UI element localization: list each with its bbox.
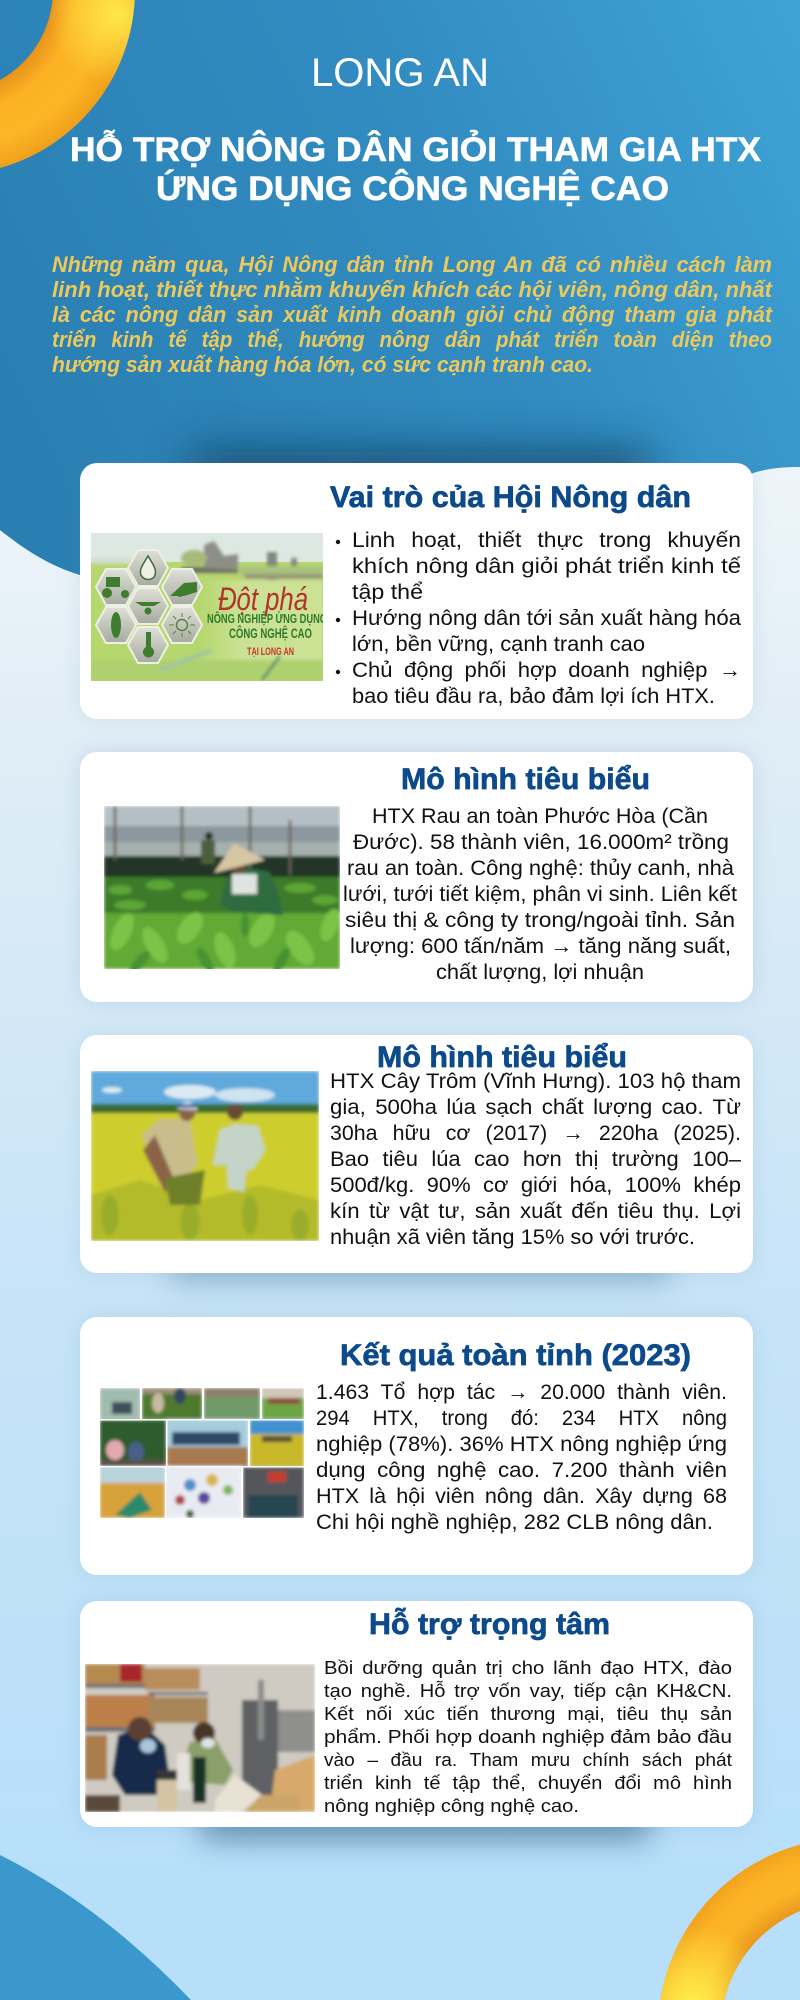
body text: key support: Bồi dưỡng quản trị cho lãnh đạo HTX, đào (324, 1657, 732, 1678)
body text: Cay Trom: nhuận xã viên tăng 15% so với trước. (330, 1226, 695, 1249)
panel: model cooperative Cay Trom (80, 1035, 753, 1283)
image: workers packaging products (85, 1664, 315, 1812)
blue corner shape bottom left (0, 1855, 191, 2000)
heading: model one: Mô hình tiêu biểu (401, 763, 650, 796)
body text: Cay Trom (330, 1070, 741, 1249)
yellow ring bottom right (660, 1845, 800, 2000)
bullet list: Hướng nông dân tới sản xuất hàng hóa (352, 607, 741, 630)
blue header background (0, 0, 800, 596)
title: HỖ TRỢ NÔNG DÂN GIỎI THAM GIA HTX (70, 130, 761, 169)
body text: Cay Trom: gia, 500ha lúa sạch chất lượng cao. Từ (330, 1096, 741, 1119)
body text: Cay Trom: Bao tiêu lúa cao hơn thị trường 100– (330, 1148, 741, 1171)
body text: key support: nông nghiệp công nghệ cao. (324, 1795, 579, 1816)
body text: results: nghiệp (78%). 36% HTX nông nghiệp ứng (316, 1433, 727, 1456)
image: high tech agriculture: TẠI LONG AN (247, 646, 294, 658)
heading: role: Vai trò của Hội Nông dân (330, 481, 691, 514)
body text: key support: Kết nối xúc tiến thương mại, tiêu thụ sản (324, 1703, 732, 1724)
body text: Cay Trom: 30ha hữu cơ (2017) → 220ha (2025). (330, 1122, 741, 1145)
yellow ring top left (0, 0, 135, 168)
panel: province-wide results 2023 (80, 1317, 753, 1575)
image: photo collage (100, 1388, 304, 1518)
body text: Phuoc Hoa: chất lượng, lợi nhuận (436, 961, 644, 984)
body text: Phuoc Hoa: HTX Rau an toàn Phước Hòa (Cần (372, 805, 708, 828)
intro paragraph: hướng sản xuất hàng hóa lớn, có sức cạnh tranh cao. (52, 352, 593, 377)
title (70, 130, 761, 208)
heading: model two: Mô hình tiêu biểu (377, 1041, 627, 1074)
title: ỨNG DỤNG CÔNG NGHỆ CAO (156, 169, 669, 208)
body text: Phuoc Hoa: lưới, tưới tiết kiệm, phân vi sinh. Liên kết (343, 883, 737, 906)
body text: results: Chi hội nghề nghiệp, 282 CLB nông dân. (316, 1511, 713, 1534)
body text: results: HTX là hội viên nông dân. Xây dựng 68 (316, 1485, 727, 1508)
body text: key support: triển kinh tế tập thể, chuyển đổi mô hình (324, 1772, 732, 1793)
heading: results: Kết quả toàn tỉnh (2023) (340, 1339, 691, 1372)
intro paragraph (52, 252, 774, 377)
heading: province: LONG AN (311, 51, 489, 95)
bullet list: Linh hoạt, thiết thực trong khuyến (352, 529, 741, 552)
body text: results: 1.463 Tổ hợp tác → 20.000 thành viên. (316, 1381, 727, 1404)
intro paragraph: là các nông dân sản xuất kinh doanh giỏi chủ động tham gia phát (52, 302, 774, 327)
image: high tech agriculture: CÔNG NGHỆ CAO (229, 624, 312, 641)
body text: Phuoc Hoa: rau an toàn. Công nghệ: thủy canh, nhà (347, 857, 734, 880)
heading: key support: Hỗ trợ trọng tâm (369, 1607, 610, 1641)
body text: Phuoc Hoa: lượng: 600 tấn/năm → tăng năng suất, (350, 935, 731, 958)
image: high tech agriculture: Đột phá (218, 581, 308, 617)
panel: key support (80, 1601, 753, 1841)
bullet list (336, 529, 741, 708)
body text: key support: phẩm. Phối hợp doanh nghiệp đảm bảo đầu (324, 1726, 732, 1747)
image: high tech agriculture: NÔNG NGHIỆP ỨNG DỤNG (207, 611, 327, 626)
body text: key support (324, 1657, 732, 1816)
bullet list: bao tiêu đầu ra, bảo đảm lợi ích HTX. (352, 685, 715, 708)
body text: Phuoc Hoa: Đước). 58 thành viên, 16.000m² trồng (353, 831, 729, 854)
body text: results: dụng công nghệ cao. 7.200 thành viên (316, 1459, 727, 1482)
body text: results (316, 1381, 727, 1534)
body text: Cay Trom: kín từ vật tư, sản xuất đến tiêu thụ. Lợi (330, 1200, 741, 1223)
body text: Cay Trom: 500đ/kg. 90% cơ giới hóa, 100% khép (330, 1174, 741, 1197)
bullet list: khích nông dân giỏi phát triển kinh tế (352, 555, 741, 578)
body text: Phuoc Hoa (343, 805, 737, 984)
bullet list: tập thể (352, 581, 423, 604)
image: woman in vegetable field (104, 806, 343, 976)
body text: Cay Trom: HTX Cây Trôm (Vĩnh Hưng). 103 hộ tham (330, 1070, 741, 1093)
panel: model cooperative Phuoc Hoa (80, 752, 753, 1002)
body text: Phuoc Hoa: siêu thị & công ty trong/ngoài tỉnh. Sản (345, 909, 735, 932)
body text: results: 294 HTX, trong đó: 234 HTX nông (316, 1407, 727, 1430)
panel: role of the farmers association (80, 452, 753, 719)
bullet list: Chủ động phối hợp doanh nghiệp → (352, 659, 741, 682)
body text: key support: vào – đầu ra. Tham mưu chính sách phát (324, 1749, 732, 1770)
image: high tech agriculture (91, 533, 327, 681)
image: two farmers in rice field (91, 1071, 319, 1241)
intro paragraph: linh hoạt, thiết thực nhằm khuyến khích các hội viên, nông dân, nhất (52, 277, 774, 302)
body text: key support: tạo nghề. Hỗ trợ vốn vay, tiếp cận KH&CN. (324, 1680, 732, 1701)
intro paragraph: Những năm qua, Hội Nông dân tỉnh Long An đã có nhiều cách làm (52, 252, 772, 277)
bullet list: lớn, bền vững, cạnh tranh cao (352, 633, 645, 656)
